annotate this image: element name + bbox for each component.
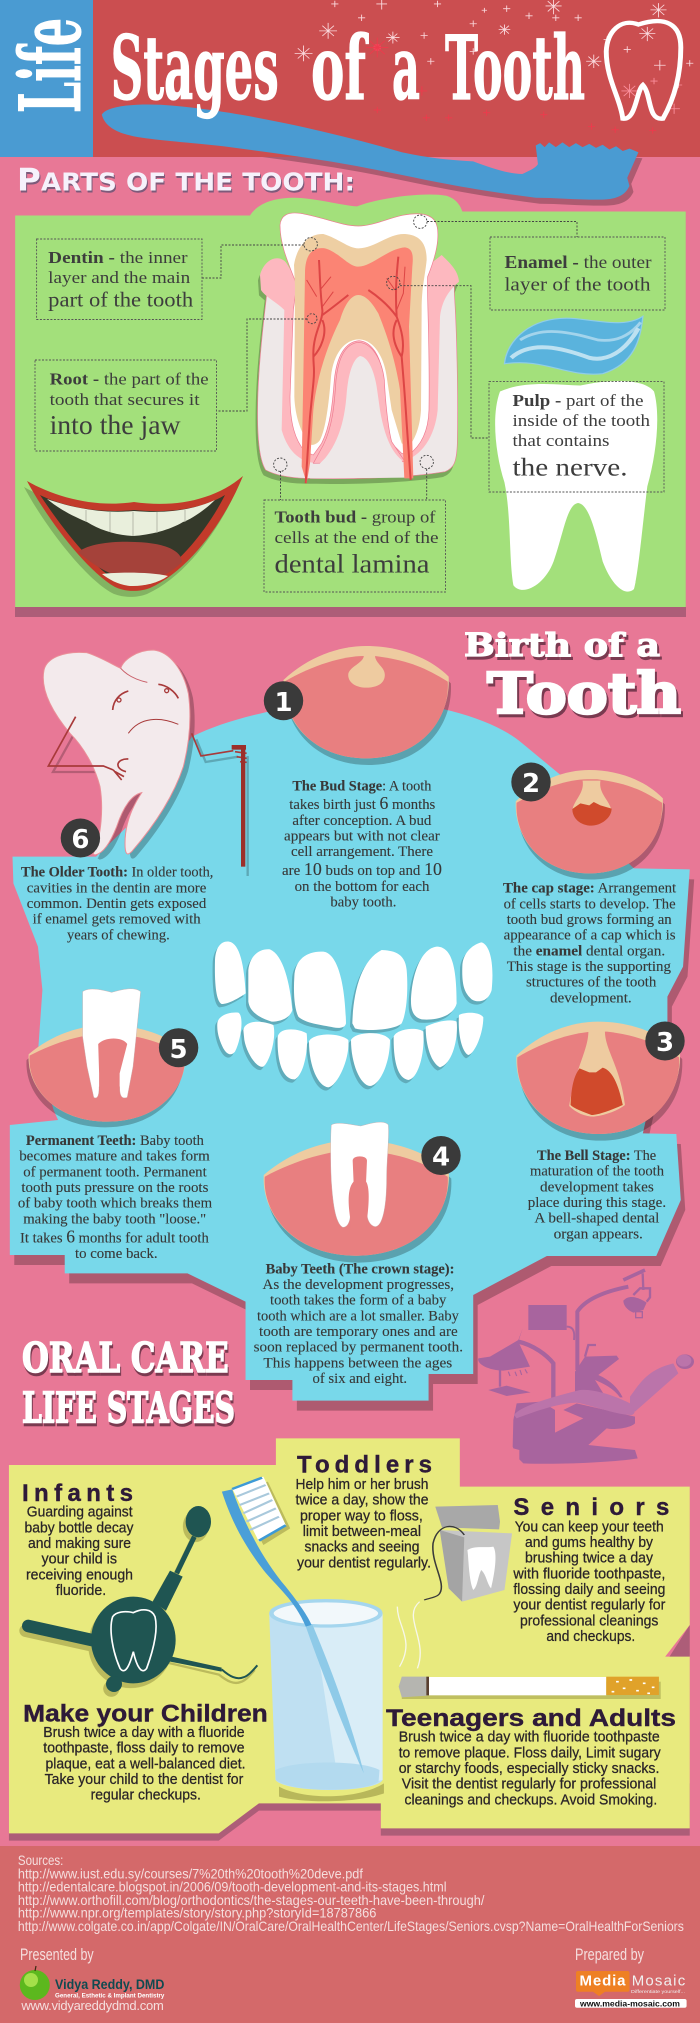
callout: tooth bud: dental lamina bbox=[274, 550, 430, 579]
text: seniors: and checkups. bbox=[546, 1629, 635, 1645]
illustration: smiling mouth bbox=[24, 476, 243, 597]
text: presented by: Presented by bbox=[20, 1945, 94, 1964]
text: the cap stage bbox=[503, 881, 677, 1006]
text: the bell stage: The Bell Stage: The bbox=[537, 1148, 657, 1164]
heading: parts of the tooth: PARTS OF THE TOOTH: bbox=[17, 163, 355, 199]
text: seniors bbox=[512, 1494, 669, 1645]
heading: oral care life stages: LIFE STAGES bbox=[22, 1384, 235, 1433]
heading: oral care life stages: ORAL CARE bbox=[22, 1334, 229, 1382]
text: the bell stage: A bell-shaped dental bbox=[534, 1211, 659, 1227]
illustration: older tooth with cane bbox=[43, 650, 248, 876]
icon: cigarette with smoke bbox=[397, 1602, 661, 1699]
text: sources: http://www.npr.org/templates/story/story.php?storyId=18787866 bbox=[18, 1905, 377, 1921]
text: the cap stage: of cells starts to develop. The bbox=[504, 896, 676, 912]
stage 1 gum: bud bbox=[283, 646, 451, 765]
logo: Media Mosaic: www.media-mosaic.com bbox=[579, 1998, 680, 2008]
text: the bell stage: organ appears. bbox=[554, 1226, 643, 1242]
text: the bud stage: are 10 buds on top and 10 bbox=[282, 859, 442, 879]
text: the bud stage bbox=[282, 779, 442, 911]
logo: Media Mosaic: Mosaic bbox=[632, 1973, 686, 1990]
illustration: dental chair silhouette bbox=[478, 1270, 694, 1464]
icon: floss box bbox=[424, 1505, 512, 1602]
icon: dental tools with tooth bbox=[26, 1506, 257, 1697]
text: the older tooth: common. Dentin gets exposed bbox=[27, 896, 207, 912]
title: Stages of a Tooth bbox=[111, 16, 585, 120]
text: the bell stage: development takes bbox=[540, 1179, 654, 1195]
text: the bud stage: cell arrangement. There bbox=[291, 844, 433, 860]
stage 5 gum: permanent tooth bbox=[26, 989, 186, 1127]
toothbrush shadow bbox=[106, 110, 642, 206]
callout: tooth bud: Tooth bud - group of bbox=[274, 508, 436, 527]
text: baby teeth: tooth are temporary ones and are bbox=[259, 1324, 458, 1340]
text: the cap stage: tooth bud grows forming an bbox=[507, 912, 672, 928]
text: sources: http://edentalcare.blogspot.in/2006/09/tooth-development-and-its-stages.html bbox=[18, 1879, 447, 1895]
text: the cap stage: This stage is the supporting bbox=[507, 959, 671, 975]
text: sources: http://www.orthofill.com/blog/orthodontics/the-stages-our-teeth-have-been-through/ bbox=[18, 1892, 484, 1908]
text: seniors: brushing twice a day bbox=[525, 1551, 654, 1567]
header red sparkles bbox=[366, 38, 656, 134]
illustration: set of white teeth bbox=[213, 942, 492, 1091]
logo: Vidya Reddy: General, Esthetic & Implant Dentistry bbox=[55, 1992, 165, 1999]
text: toddlers: twice a day, show the bbox=[296, 1493, 428, 1509]
text: teenagers and adults: to remove plaque. Floss daily, Limit sugary bbox=[399, 1745, 661, 1761]
callout: root: into the jaw bbox=[50, 410, 181, 440]
callout: tooth bud bbox=[264, 500, 446, 592]
text: permanent teeth: of baby tooth which breaks them bbox=[18, 1196, 212, 1212]
text: the bell stage: maturation of the tooth bbox=[530, 1164, 664, 1180]
text: the bud stage: takes birth just 6 months bbox=[289, 793, 435, 813]
text: the cap stage: appearance of a cap which is bbox=[504, 928, 676, 944]
text: permanent teeth: of permanent tooth. Permanent bbox=[23, 1164, 208, 1180]
text: seniors: with fluoride toothpaste, bbox=[512, 1566, 665, 1582]
diagram: tooth cross-section bbox=[256, 213, 459, 484]
heading: birth of a tooth: Birth of a bbox=[464, 626, 660, 664]
text: the older tooth: The Older Tooth: In older tooth, bbox=[21, 865, 213, 881]
callout: dentin: part of the tooth bbox=[48, 288, 194, 312]
text: teenagers and adults: Visit the dentist regularly for professional bbox=[402, 1777, 656, 1793]
text: teenagers and adults: cleanings and checkups. Avoid Smoking. bbox=[404, 1792, 657, 1808]
callout: dentin bbox=[37, 239, 202, 320]
stage number badges: 3 bbox=[656, 1028, 674, 1058]
stage number badges: 1 bbox=[274, 688, 293, 718]
title: Stages of a Tooth: of bbox=[311, 16, 369, 120]
text: the older tooth bbox=[21, 865, 213, 943]
text: the cap stage: The cap stage: Arrangement bbox=[503, 881, 677, 897]
text: permanent teeth: making the baby tooth "loose." bbox=[23, 1211, 206, 1227]
text: permanent teeth: It takes 6 months for adult tooth bbox=[20, 1226, 209, 1246]
text: teenagers and adults: Brush twice a day with fluoride toothpaste bbox=[399, 1730, 660, 1746]
text: permanent teeth: Permanent Teeth: Baby tooth bbox=[26, 1133, 204, 1149]
callout: pulp: inside of the tooth bbox=[512, 411, 651, 430]
callout markers and leader lines bbox=[202, 215, 577, 500]
title: Stages of a Tooth: Stages bbox=[111, 16, 279, 120]
text: seniors: flossing daily and seeing bbox=[513, 1582, 665, 1598]
heading: birth of a tooth bbox=[464, 626, 681, 727]
text: baby teeth: Baby Teeth (The crown stage): bbox=[266, 1261, 454, 1277]
text: permanent teeth bbox=[18, 1133, 212, 1262]
text: toddlers: limit between-meal bbox=[303, 1524, 421, 1540]
panel: oral care life stages bbox=[9, 1438, 690, 1841]
text: the cap stage: the enamel dental organ. bbox=[513, 943, 665, 959]
stage number badges bbox=[61, 681, 685, 1175]
text: teenagers and adults bbox=[386, 1705, 676, 1808]
text: the bell stage bbox=[528, 1148, 666, 1242]
illustration: toothpaste bbox=[504, 316, 643, 374]
text: seniors: and gums healthy by bbox=[525, 1535, 654, 1551]
text: infants: Guarding against bbox=[27, 1505, 133, 1521]
text: permanent teeth: to come back. bbox=[75, 1246, 158, 1262]
text: the older tooth: cavities in the dentin are more bbox=[27, 880, 207, 896]
text: the cap stage: development. bbox=[550, 990, 632, 1006]
icon: header tooth outline bbox=[606, 21, 681, 119]
text: infants bbox=[22, 1480, 134, 1599]
callout: enamel: layer of the tooth bbox=[504, 276, 650, 296]
text: make your children: Brush twice a day with a fluoride bbox=[43, 1725, 245, 1741]
heading: oral care life stages bbox=[22, 1334, 235, 1433]
text: the bud stage: on the bottom for each bbox=[295, 879, 430, 895]
text: the older tooth: if enamel gets removed with bbox=[33, 912, 201, 928]
text: seniors: You can keep your teeth bbox=[515, 1519, 664, 1535]
text: toddlers bbox=[296, 1452, 432, 1571]
text: baby teeth: This happens between the ages bbox=[263, 1355, 452, 1371]
callout: enamel bbox=[490, 237, 665, 310]
text: infants: your child is bbox=[42, 1552, 117, 1568]
callout: tooth bud: cells at the end of the bbox=[274, 528, 438, 547]
text: toddlers: proper way to floss, bbox=[300, 1508, 423, 1524]
panel: parts of the tooth bbox=[15, 194, 686, 617]
callout: pulp: Pulp - part of the bbox=[512, 391, 644, 410]
header band bbox=[0, 0, 700, 157]
text: toddlers: Help him or her brush bbox=[296, 1477, 428, 1493]
header pink sparkles bbox=[621, 78, 682, 114]
text: sources: Sources: bbox=[18, 1852, 63, 1868]
text: infants: Infants bbox=[22, 1480, 133, 1507]
stage number badges: 2 bbox=[522, 769, 540, 799]
text: teenagers and adults: Teenagers and Adults bbox=[386, 1705, 676, 1732]
stage number badges: 5 bbox=[170, 1035, 188, 1065]
callout: root: Root - the part of the bbox=[50, 370, 209, 389]
text: seniors: professional cleanings bbox=[520, 1613, 658, 1629]
text: the bud stage: after conception. A bud bbox=[292, 813, 432, 829]
title: Stages of a Tooth: a bbox=[392, 16, 420, 120]
text: baby teeth: tooth which are a lot smaller. Baby bbox=[257, 1308, 459, 1324]
text: infants: fluoride. bbox=[56, 1583, 106, 1599]
callout: root bbox=[35, 360, 216, 451]
stage number badges: 4 bbox=[432, 1142, 450, 1172]
text: make your children bbox=[23, 1701, 268, 1804]
logo: Vidya Reddy: Vidya Reddy, DMD bbox=[55, 1976, 164, 1992]
text: the bell stage: place during this stage. bbox=[528, 1195, 666, 1211]
text: seniors: your dentist regularly for bbox=[513, 1598, 666, 1614]
text: baby teeth: of six and eight. bbox=[312, 1371, 407, 1387]
callout: pulp bbox=[489, 382, 664, 492]
text: toddlers: snacks and seeing bbox=[304, 1540, 420, 1556]
text: make your children: toothpaste, floss daily to remove bbox=[43, 1741, 245, 1757]
logo: Media Mosaic: Differentiate yourself... bbox=[631, 1989, 685, 1994]
text: sources bbox=[18, 1852, 684, 1934]
text: teenagers and adults: or starchy foods, especially sticky snacks. bbox=[399, 1761, 659, 1777]
stage 4 gum: baby tooth bbox=[264, 1122, 451, 1263]
text: make your children: regular checkups. bbox=[91, 1788, 201, 1804]
stage 2 gum: cap bbox=[516, 770, 665, 879]
text: the bud stage: The Bud Stage: A tooth bbox=[292, 779, 432, 795]
toothbrush bbox=[102, 104, 638, 200]
text: toddlers: Toddlers bbox=[297, 1452, 432, 1479]
text: the bud stage: baby tooth. bbox=[330, 895, 396, 911]
text: prepared by: Prepared by bbox=[575, 1945, 644, 1964]
panel: birth of a tooth blue backdrop bbox=[10, 700, 694, 1411]
stage 3 gum: bell bbox=[516, 1022, 682, 1141]
callout: pulp: that contains bbox=[512, 431, 610, 450]
callout: dentin: Dentin - the inner bbox=[48, 248, 188, 267]
text: the bud stage: appears but with not clear bbox=[284, 829, 440, 845]
text: the cap stage: structures of the tooth bbox=[526, 975, 657, 991]
text: the older tooth: years of chewing. bbox=[67, 927, 170, 943]
callout: root: tooth that secures it bbox=[50, 390, 200, 409]
stage number badges: 6 bbox=[71, 825, 89, 855]
text: infants: baby bottle decay bbox=[24, 1520, 134, 1536]
icon: glass with toothbrush bbox=[222, 1477, 384, 1801]
text: make your children: Take your child to the dentist for bbox=[45, 1772, 243, 1788]
text: permanent teeth: tooth puts pressure on the roots bbox=[21, 1180, 209, 1196]
text: sources: http://www.iust.edu.sy/courses/7%20th%20tooth%20deve.pdf bbox=[18, 1865, 363, 1881]
callout: enamel: Enamel - the outer bbox=[504, 252, 652, 272]
text: baby teeth: tooth takes the form of a baby bbox=[270, 1293, 447, 1309]
logo: Vidya Reddy bbox=[20, 1966, 165, 2013]
text: baby teeth bbox=[254, 1261, 463, 1387]
text: infants: and making sure bbox=[28, 1536, 131, 1552]
callout: dentin: layer and the main bbox=[48, 268, 191, 287]
footer band bbox=[0, 1846, 700, 2023]
text: make your children: plaque, eat a well-balanced diet. bbox=[46, 1756, 246, 1772]
logo: Media Mosaic: Media bbox=[580, 1973, 626, 1990]
illustration: white tooth behind pulp text bbox=[495, 381, 657, 592]
header stars bbox=[295, 0, 693, 70]
logo: Media Mosaic bbox=[575, 1971, 687, 2008]
heading: birth of a tooth: Tooth bbox=[487, 661, 681, 727]
text: make your children: Make your Children bbox=[23, 1701, 268, 1728]
text: permanent teeth: becomes mature and takes form bbox=[19, 1149, 210, 1165]
text: seniors: Seniors bbox=[513, 1494, 669, 1521]
logo: Vidya Reddy: www.vidyareddydmd.com bbox=[20, 1998, 164, 2013]
text: toddlers: your dentist regularly. bbox=[297, 1555, 431, 1571]
text: baby teeth: As the development progresses, bbox=[262, 1277, 454, 1293]
text: baby teeth: soon replaced by permanent tooth. bbox=[254, 1340, 463, 1356]
text: infants: receiving enough bbox=[26, 1567, 133, 1583]
callout: pulp: the nerve. bbox=[512, 455, 628, 482]
